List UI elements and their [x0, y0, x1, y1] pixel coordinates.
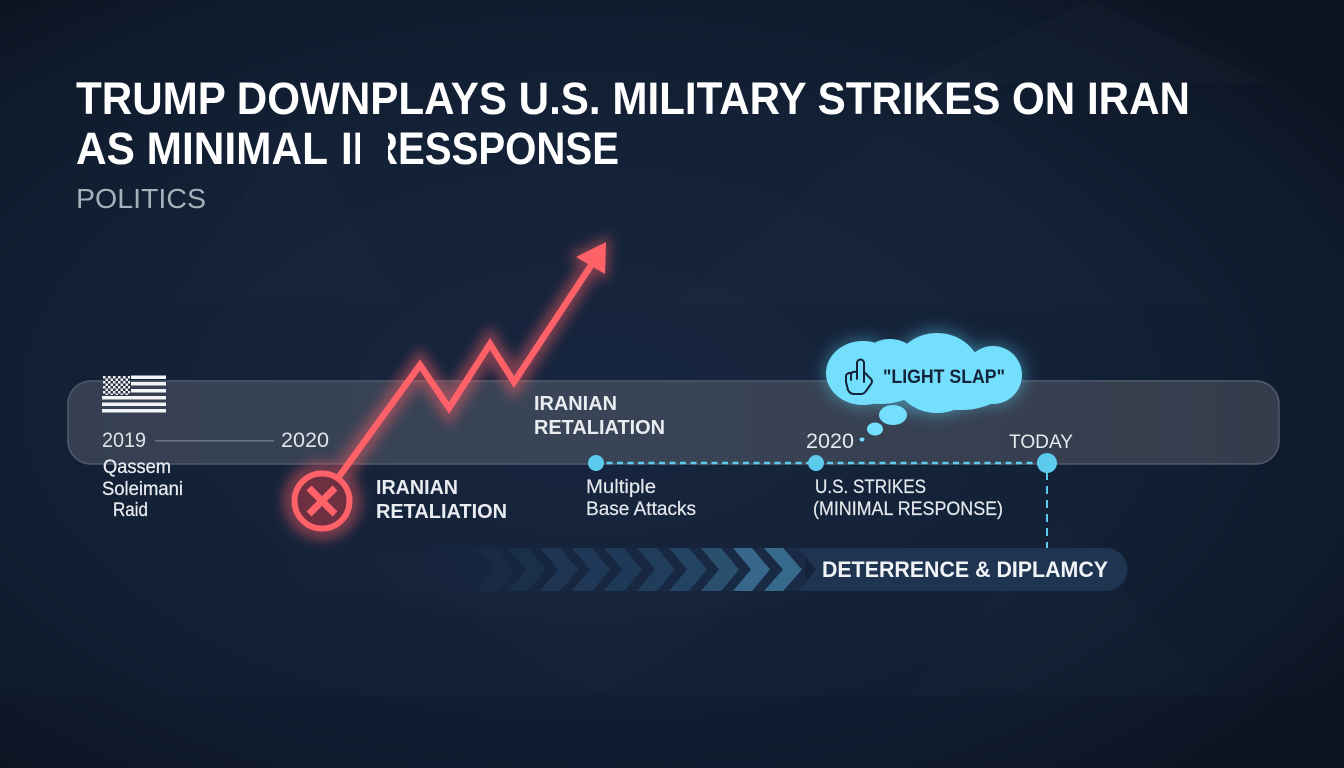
icon: US flag: [102, 376, 166, 412]
title: RESSPONSE: [369, 123, 619, 174]
label: Iranian retaliation (lower): RETALIATION: [376, 501, 507, 523]
label: Qassem Soleimani Raid: Qassem: [103, 457, 171, 478]
title: AS MINIMAL: [76, 123, 328, 174]
title: [76, 82, 1188, 164]
label: U.S. strikes: (MINIMAL RESPONSE): [813, 499, 1003, 520]
timeline start: 2019 to 2020: 2020: [281, 429, 329, 452]
label: multiple base attacks: Base Attacks: [586, 499, 696, 520]
thought bubble: light slap: [825, 331, 1024, 442]
red escalation arrow: [291, 242, 606, 532]
timeline start: 2019 to 2020: 2019: [102, 429, 146, 452]
label: multiple base attacks: [586, 477, 696, 520]
label: Qassem Soleimani Raid: Soleimani: [102, 479, 183, 500]
label: Qassem Soleimani Raid: Raid: [113, 500, 148, 521]
deterrence pill with chevrons: [290, 548, 1128, 591]
title: TRUMP DOWNPLAYS U.S. MILITARY STRIKES ON IRAN: [76, 73, 1190, 124]
label: Iranian retaliation (upper): [534, 393, 665, 439]
label: U.S. strikes: U.S. STRIKES: [815, 477, 926, 498]
category label: POLITICS: [76, 183, 206, 214]
icon: red X circle: [294, 474, 350, 528]
label: multiple base attacks: Multiple: [586, 477, 656, 498]
year labels: [806, 430, 1073, 453]
label: Qassem Soleimani Raid: [102, 457, 183, 521]
label: Iranian retaliation (lower): IRANIAN: [376, 477, 458, 499]
year labels: 2020: [806, 430, 854, 453]
timeline band: [68, 381, 1279, 464]
label: Iranian retaliation (upper): IRANIAN: [534, 393, 617, 415]
timeline start: 2019 to 2020: [102, 429, 329, 452]
title: IN: [341, 123, 383, 174]
dashed timeline with markers: [588, 453, 1057, 548]
icon: hand: [846, 360, 872, 394]
deterrence pill with chevrons: DETERRENCE & DIPLAMCY: [822, 557, 1108, 582]
label: Iranian retaliation (lower): [376, 477, 507, 523]
label: Iranian retaliation (upper): RETALIATION: [534, 417, 665, 439]
thought bubble: light slap: "LIGHT SLAP": [883, 366, 1005, 388]
label: U.S. strikes: [813, 477, 1003, 520]
year labels: TODAY: [1009, 431, 1073, 453]
